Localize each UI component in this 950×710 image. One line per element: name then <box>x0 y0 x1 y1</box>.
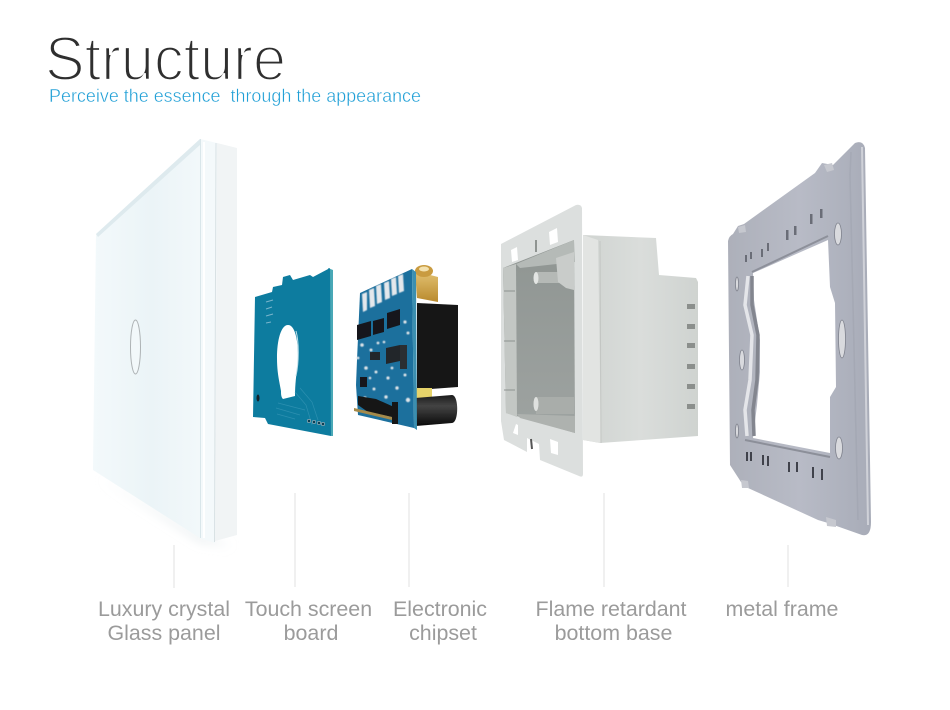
component: metal frame <box>728 142 871 535</box>
frame square holes <box>511 228 558 455</box>
label: touch screen board: Touch screen <box>245 597 372 621</box>
label: glass panel: Glass panel <box>108 621 220 645</box>
title: Structure <box>45 25 286 94</box>
housing body <box>583 235 698 443</box>
upper bracket <box>556 252 574 290</box>
label: bottom base: Flame retardant <box>536 597 687 621</box>
bottom perforations <box>746 452 823 480</box>
label: electronic chipset: chipset <box>409 621 477 645</box>
silkscreen marks <box>266 300 273 323</box>
touch button ring <box>130 320 140 374</box>
label: metal frame: metal frame <box>726 597 838 621</box>
contact pads <box>307 419 325 426</box>
components on board <box>357 309 407 387</box>
front frame <box>501 205 583 477</box>
leader line: metal frame <box>787 545 789 587</box>
leader line: electronic chipset <box>408 493 410 587</box>
leader line: touch screen board <box>294 493 296 587</box>
leader line: glass panel <box>173 545 175 588</box>
vent slots <box>687 304 695 409</box>
cavity top ledge <box>516 240 575 268</box>
top perforations <box>745 209 822 262</box>
board face <box>253 268 331 436</box>
circuit board <box>356 269 414 428</box>
brass terminal <box>415 265 438 302</box>
back plate of glass panel <box>215 143 237 541</box>
solder highlights <box>357 320 410 402</box>
yellow spacer <box>414 388 432 398</box>
small slot <box>256 394 260 402</box>
capacitor <box>415 395 457 426</box>
leader line: bottom base <box>603 493 605 587</box>
corner tabs <box>738 163 836 527</box>
lower inner lip <box>745 440 830 457</box>
flange shoulder <box>583 235 601 443</box>
right edge highlight <box>862 147 868 525</box>
bottom relay and pin <box>358 396 394 417</box>
label: bottom base: bottom base <box>555 621 672 645</box>
circuit traces <box>276 388 318 425</box>
inner cavity <box>503 240 575 433</box>
component: glass panel <box>93 139 237 546</box>
transformer block <box>417 303 458 390</box>
cavity left wall <box>503 264 517 417</box>
front glass face <box>93 139 200 538</box>
LED strip <box>362 274 404 312</box>
glass edge <box>200 139 217 543</box>
subtitle: Perceive the essence through the appearance <box>49 85 421 106</box>
bright inner rail on left <box>745 276 752 436</box>
component: electronic chipset <box>354 265 458 430</box>
frame pins <box>504 291 515 390</box>
screw posts <box>534 272 574 414</box>
label: touch screen board: board <box>284 621 338 645</box>
label: electronic chipset: Electronic <box>393 597 487 621</box>
label: glass panel: Luxury crystal <box>98 597 230 621</box>
component: flame retardant bottom base <box>501 205 698 477</box>
mounting slots <box>736 223 846 459</box>
bulb-shaped opening <box>277 325 298 399</box>
board edge <box>328 268 333 436</box>
cavity bottom ledge <box>517 414 575 433</box>
frame plate <box>728 142 871 535</box>
component: touch screen board <box>253 268 333 436</box>
